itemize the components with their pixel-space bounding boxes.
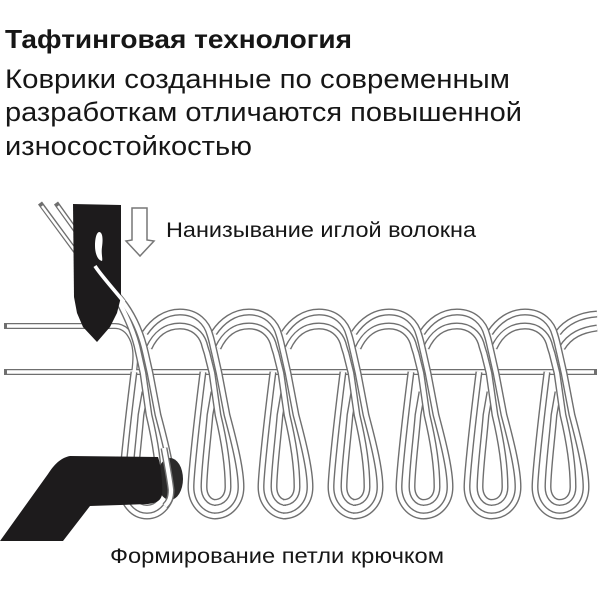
fibre tails above needle — [40, 203, 76, 252]
icon: hook — [0, 448, 183, 541]
loop 3 — [261, 312, 380, 516]
description text: разработкам отличаются повышенной — [5, 97, 522, 127]
icon: needle — [73, 204, 124, 342]
label: loop forming: Формирование петли крючком — [110, 545, 444, 568]
fibre over hook — [164, 448, 171, 506]
description text: Коврики созданные по современным — [5, 64, 510, 94]
first loop fibre from needle — [118, 296, 172, 516]
hook body — [0, 456, 162, 541]
title: Тафтинговая технология — [5, 24, 352, 54]
fibre ends at right — [535, 314, 597, 516]
loop 4 — [331, 312, 450, 516]
backing threads — [4, 326, 597, 373]
label: needle threading: Нанизывание иглой волокна — [166, 219, 476, 242]
hook tip fuzz — [157, 458, 183, 500]
loop 5 — [399, 312, 518, 516]
description text: износостойкостью — [5, 131, 252, 161]
arrow: downward — [126, 208, 154, 256]
diagram: tufted fibre loops — [4, 296, 597, 516]
loop 6 — [467, 312, 586, 516]
description text — [5, 64, 522, 161]
loop 2 — [191, 312, 310, 516]
loop 1 — [122, 312, 241, 516]
